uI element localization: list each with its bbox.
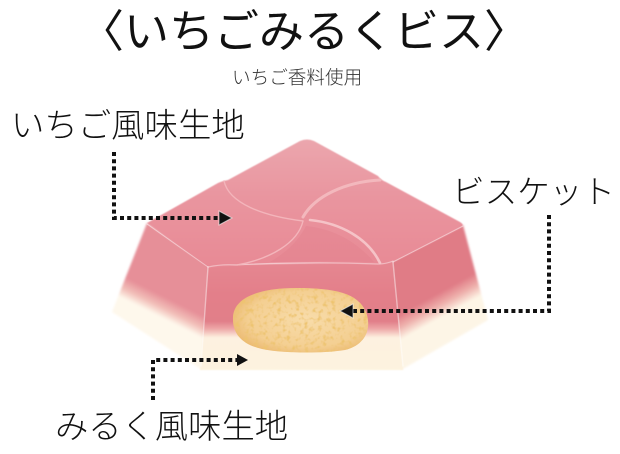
label: strawberry layer: いちご風味生地 — [11, 108, 245, 145]
label: biscuit: ビスケット — [452, 173, 615, 210]
left side face — [112, 223, 210, 370]
biscuit — [233, 288, 368, 353]
arrow: biscuit — [340, 215, 549, 318]
top face — [147, 140, 463, 268]
chocolate body — [112, 140, 488, 370]
swirl embossing on top — [224, 180, 380, 265]
front face — [200, 262, 403, 370]
arrow: milk layer — [153, 354, 248, 400]
subtitle: いちご香料使用 — [232, 67, 362, 88]
right side face — [391, 225, 488, 370]
title: 〈いちごみるくビス〉 — [79, 6, 529, 57]
edge highlights — [147, 224, 463, 366]
arrow: strawberry layer — [114, 152, 232, 225]
label: milk layer: みるく風味生地 — [55, 409, 288, 446]
